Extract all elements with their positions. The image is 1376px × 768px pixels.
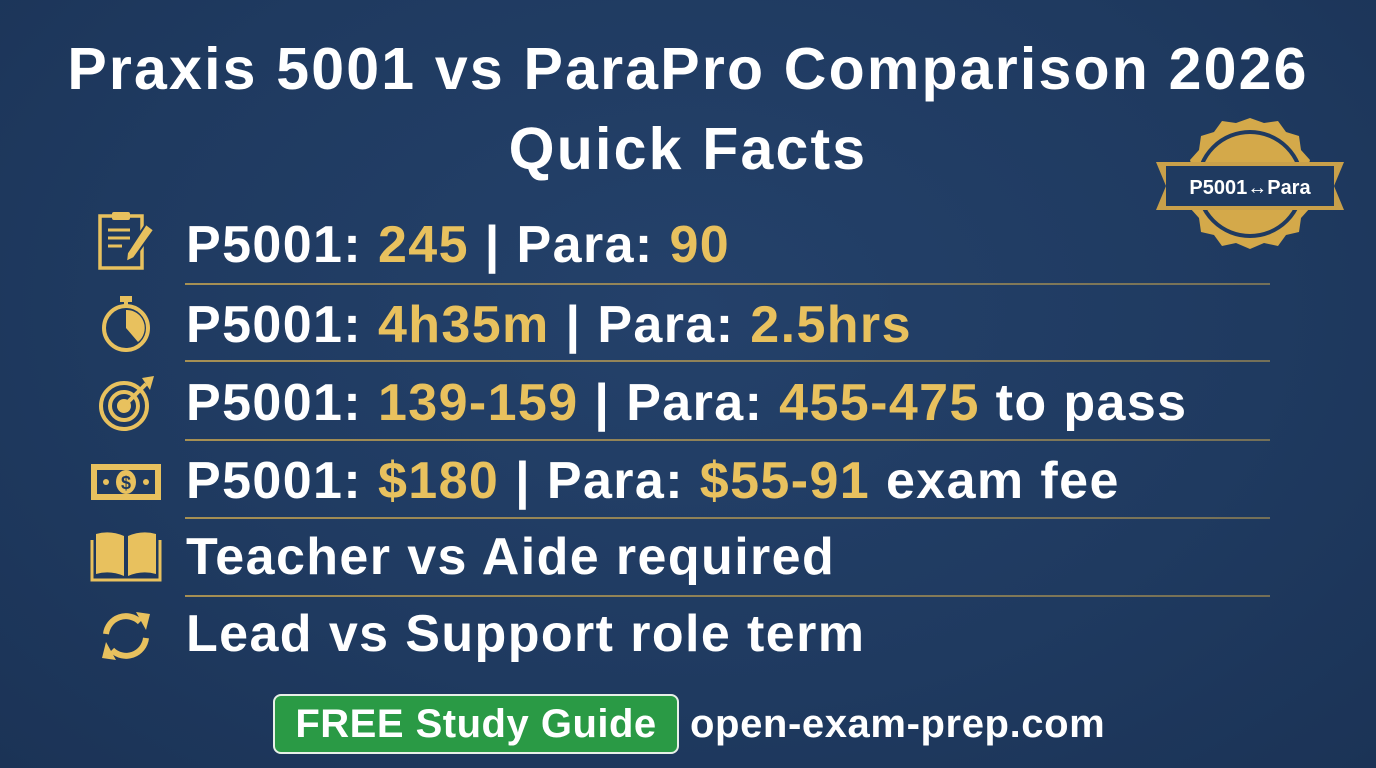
- icon: stopwatch: [102, 296, 150, 352]
- title: Praxis 5001 vs ParaPro Comparison 2026: [67, 36, 1309, 102]
- title: [67, 36, 1309, 182]
- row 4: P5001: $180 | Para: $55-91 exam fee: [186, 452, 1120, 510]
- badge: [1156, 118, 1344, 249]
- icon: clipboard: [98, 212, 153, 270]
- footer url: open-exam-prep.com: [690, 702, 1105, 746]
- footer button: [273, 694, 679, 754]
- footer button: FREE Study Guide: [295, 702, 657, 746]
- row 2: P5001: 4h35m | Para: 2.5hrs: [186, 296, 912, 354]
- icon: target: [99, 376, 154, 431]
- row 3: P5001: 139-159 | Para: 455-475 to pass: [186, 374, 1188, 432]
- row 1: P5001: 245 | Para: 90: [186, 216, 730, 274]
- icon: money: $: [121, 473, 131, 493]
- row 6: Lead vs Support role term: [186, 605, 865, 663]
- icon: book: [90, 532, 162, 582]
- icon: money: [91, 464, 161, 500]
- title: Quick Facts: [509, 116, 867, 182]
- badge: P5001↔Para: [1189, 177, 1311, 199]
- icon: refresh: [102, 612, 150, 660]
- row 5: Teacher vs Aide required: [186, 528, 835, 586]
